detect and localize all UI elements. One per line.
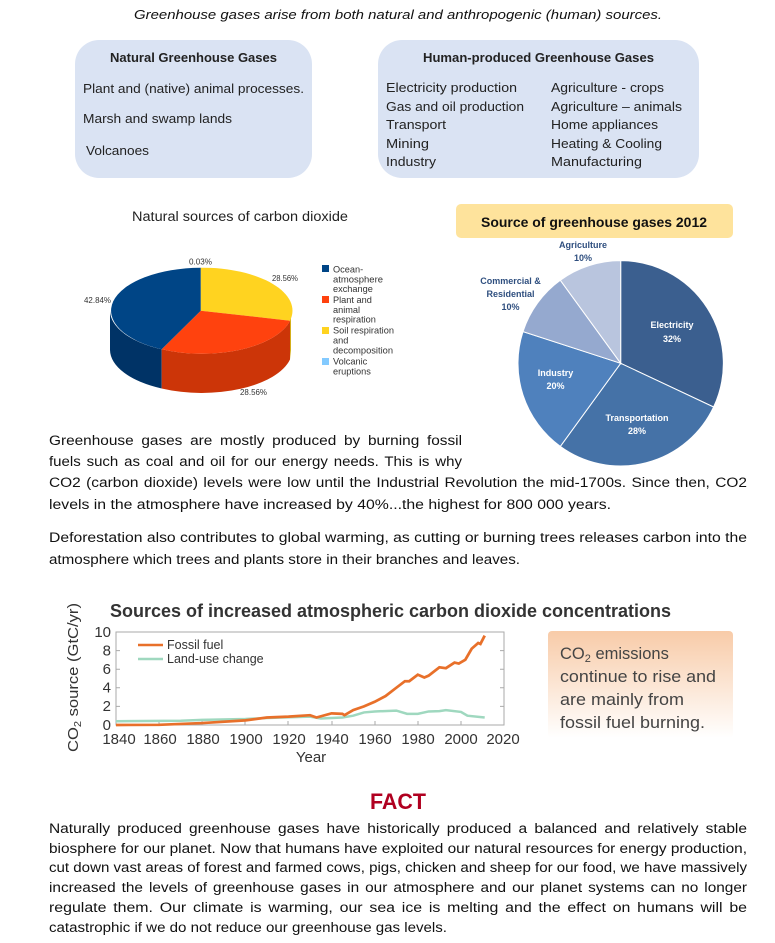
list: natural sources: Volcanoes [86,143,150,158]
list: human sources left column: Mining [386,136,429,151]
text block: deforestation paragraph: Deforestation also contributes to global warming, as cutting or burning trees releases carbon into the [49,530,747,545]
pie labels [480,240,694,436]
pie labels: 20% [546,381,565,391]
pie value labels: 28.56% [240,388,267,397]
list: human sources left column: Electricity production [386,80,517,95]
legend: Fossil fuel [167,638,223,652]
text block: fact paragraph: catastrophic if we do not reduce our greenhouse gas levels. [49,920,447,935]
x axis ticks: 2020 [486,731,520,748]
x axis ticks: 1980 [401,731,435,748]
pie legend: animal [333,305,360,315]
list: human sources left column: Transport [386,117,446,132]
list: natural sources: Plant and (native) animal processes. [83,81,304,96]
list: human sources left column [386,80,524,169]
land-use change line [116,710,485,721]
y axis title: source (GtC/yr) [65,603,82,721]
pie legend: respiration [333,314,376,324]
list: human sources right column: Home appliances [551,117,659,132]
text block: fact paragraph: biosphere for our planet. Now that humans have exploited our natural resources for energy production, [49,841,747,856]
y axis ticks: 0 [103,717,111,734]
pie legend: and [333,336,348,346]
pie labels: 32% [663,334,681,344]
text block: fact paragraph: increased the levels of greenhouse gases in our atmosphere and our planet systems can no longer [49,880,748,895]
pie slices top [111,268,292,354]
y axis ticks: 8 [103,642,111,660]
text block: fossil fuels paragraph: CO2 (carbon dioxide) levels were low until the Industrial Revolution the mid-1700s. Since then, CO2 [49,475,747,490]
fossil fuel line [116,636,485,725]
pie legend: Ocean- [333,264,363,274]
pie legend: exchange [333,284,373,294]
pie labels: Residential [486,289,535,299]
pie legend: atmosphere [333,274,383,284]
y axis ticks: 6 [103,661,111,678]
pie legend: decomposition [333,346,393,356]
title: intro sentence: Greenhouse gases arise from both natural and anthropogenic (human) sources. [134,7,662,22]
chart heading: source of greenhouse gases 2012 [456,204,733,238]
pie legend: Soil respiration [333,326,394,336]
text block: fossil fuels paragraph: Greenhouse gases are mostly produced by burning fossil [49,433,462,448]
x axis ticks: 1880 [186,731,220,748]
y axis title: 2 [73,720,84,727]
list: human sources right column: Agriculture - crops [551,80,665,95]
text block: fossil fuels paragraph: levels in the atmosphere have increased by 40%...the highest for 800 000 years. [49,497,611,512]
y axis ticks: 4 [103,680,111,696]
x axis ticks: 1840 [102,731,136,748]
list: human sources left column: Industry [386,154,437,169]
callout: CO2 emissions: CO [560,645,585,663]
callout: CO2 emissions: emissions [591,645,669,663]
chart: natural sources of carbon dioxide 3D pie [84,209,394,397]
pie labels: Electricity [650,320,694,330]
callout: CO2 emissions: 2 [585,653,591,665]
pie sides [110,311,291,393]
list: human sources right column [551,80,683,169]
pie labels: 10% [574,253,592,263]
chart title: Natural sources of carbon dioxide [132,209,348,224]
pie labels: 28% [628,426,646,436]
text block: fact paragraph [49,821,748,935]
pie labels: Commercial & [480,276,541,286]
list: human sources right column: Manufacturing [551,154,642,169]
panel: natural greenhouse gases [75,40,312,178]
chart: source of greenhouse gases pie [480,240,723,466]
heading: human-produced greenhouse gases: Human-produced Greenhouse Gases [423,50,654,65]
y axis ticks: 10 [94,624,111,641]
pie legend: eruptions [333,366,371,376]
callout: CO2 emissions: fossil fuel burning. [560,714,705,732]
text block: fact paragraph: regulate them. Our climate is warming, our sea ice is melting and the effect on humans will be [49,900,747,915]
x axis ticks: 2000 [444,731,478,748]
text block: fossil fuels paragraph [49,433,747,512]
pie value labels: 42.84% [84,296,111,305]
chart heading: source of greenhouse gases 2012: Source of greenhouse gases 2012 [481,214,707,230]
heading: natural greenhouse gases: Natural Greenhouse Gases [110,50,277,65]
pie labels: Agriculture [559,240,607,250]
text block: deforestation paragraph [49,530,747,567]
y axis title: CO [65,730,82,752]
callout: CO2 emissions: continue to rise and [560,668,716,686]
pie value labels: 0.03% [189,258,212,266]
pie labels: Industry [538,368,573,378]
pie value labels: 28.56% [272,274,298,283]
list: human sources left column: Gas and oil production [386,99,524,114]
x axis title: Year [296,749,326,766]
list: human sources right column: Heating & Cooling [551,136,662,151]
pie labels: 10% [501,302,520,312]
legend: Land-use change [167,652,264,666]
text block: fact paragraph: cut down vast areas of forest and farmed cows, pigs, chicken and sheep for our food, we have massively [49,860,747,875]
legend [138,638,264,666]
list: natural sources [83,81,304,158]
callout: CO2 emissions [548,631,733,738]
x axis ticks: 1860 [143,731,177,748]
x axis ticks: 1940 [315,731,349,748]
pie value labels [84,258,298,397]
pie legend: Plant and [333,295,372,305]
list: human sources right column: Agriculture – animals [551,99,683,114]
plot frame [116,632,504,725]
panel: human-produced greenhouse gases [378,40,699,178]
pie legend: Volcanic [333,356,368,366]
text block: fact paragraph: Naturally produced greenhouse gases have historically produced a balanced and relatively stable [49,821,747,836]
x axis ticks: 1960 [358,731,392,748]
text block: deforestation paragraph: atmosphere which trees and plants store in their branches and leaves. [49,552,520,567]
chart title: Sources of increased atmospheric carbon dioxide concentrations [110,601,671,621]
y axis ticks: 2 [103,698,111,715]
chart: sources of increased atmospheric CO2 line chart [65,601,671,766]
pie labels: Transportation [605,413,669,423]
x axis ticks [102,731,520,748]
list: natural sources: Marsh and swamp lands [83,111,233,126]
x axis ticks: 1920 [272,731,306,748]
heading: FACT: FACT [370,789,427,814]
x axis ticks: 1900 [229,731,263,748]
callout: CO2 emissions: are mainly from [560,691,684,709]
text block: fossil fuels paragraph: fuels such as coal and oil for our energy needs. This is why [49,454,462,469]
pie legend [322,264,394,376]
y axis ticks [94,624,111,734]
